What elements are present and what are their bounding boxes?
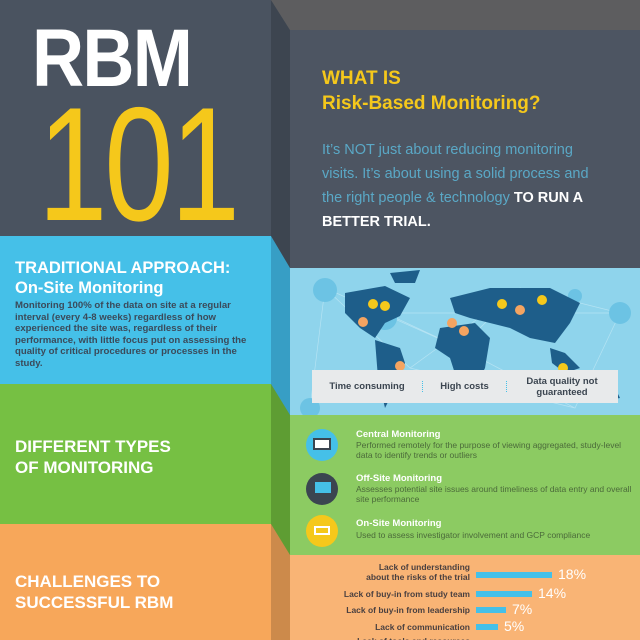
- bar chart: challenges: Lack of buy-in from leadership: [346, 605, 470, 615]
- heading: DIFFERENT TYPES: [15, 437, 171, 456]
- bar chart: challenges: Lack of buy-in from study team: [344, 589, 470, 599]
- heading: [15, 437, 171, 477]
- heading: SUCCESSFUL RBM: [15, 593, 173, 612]
- panel: map: [290, 268, 640, 415]
- icon: building: [306, 515, 338, 547]
- title 101: 101: [38, 74, 237, 255]
- right dark panel: what is RBM: [290, 30, 640, 268]
- text: Monitoring 100% of the data on site at a regular interval (every 4-8 weeks) regardless of how experienced the site was, regardless of their performance, with little focus put on assessing the quality of critical procedures or processes in the study.: [15, 300, 246, 368]
- stats bar: Data quality not guaranteed: [526, 376, 598, 398]
- item off-site: Off-Site Monitoring: [356, 473, 442, 484]
- bar chart: challenges: Lack of understanding: [379, 562, 470, 572]
- map: [300, 270, 631, 415]
- panel: challenges: [0, 524, 271, 640]
- heading: OF MONITORING: [15, 458, 154, 477]
- description: It’s NOT just about reducing monitoring visits. It’s about using a solid process and the right people & technology TO RUN A BETTER TRIAL.: [322, 142, 589, 230]
- item on-site: On-Site Monitoring: [356, 518, 442, 529]
- icon: laptop: [306, 473, 338, 505]
- panel: types list: [290, 415, 640, 555]
- item central: Performed remotely for the purpose of viewing aggregated, study-level data to identify trends or outliers: [356, 440, 621, 460]
- heading: [322, 68, 541, 114]
- title RBM: RBM: [32, 13, 191, 104]
- item off-site: [306, 473, 631, 505]
- heading: CHALLENGES TO: [15, 572, 160, 591]
- stats bar: [312, 370, 618, 403]
- item central: [306, 429, 621, 461]
- item central: Central Monitoring: [356, 429, 440, 440]
- item on-site: [306, 515, 590, 547]
- icon: monitor: [306, 429, 338, 461]
- heading: [15, 259, 230, 297]
- heading: On-Site Monitoring: [15, 279, 163, 297]
- bar chart: challenges: about the risks of the trial: [366, 572, 470, 582]
- heading: WHAT IS: [322, 68, 401, 89]
- item off-site: Assesses potential site issues around timeliness of data entry and overall site performance: [356, 484, 631, 504]
- stats bar: High costs: [440, 381, 489, 392]
- stats bar: Time consuming: [329, 381, 405, 392]
- bar chart: challenges: 7%: [512, 601, 532, 617]
- bar chart: challenges: Lack of communication: [375, 622, 470, 632]
- bar chart: challenges: 18%: [558, 566, 586, 582]
- left dark panel: [0, 0, 271, 236]
- bar chart: challenges: 14%: [538, 585, 566, 601]
- bar chart: challenges: [290, 555, 640, 640]
- heading: TRADITIONAL APPROACH:: [15, 259, 230, 277]
- bar chart: challenges: 5%: [504, 618, 524, 634]
- heading: Risk-Based Monitoring?: [322, 93, 541, 114]
- item on-site: Used to assess investigator involvement and GCP compliance: [356, 530, 590, 540]
- panel: traditional approach: [0, 236, 271, 384]
- heading: [15, 572, 173, 612]
- panel: different types: [0, 384, 271, 524]
